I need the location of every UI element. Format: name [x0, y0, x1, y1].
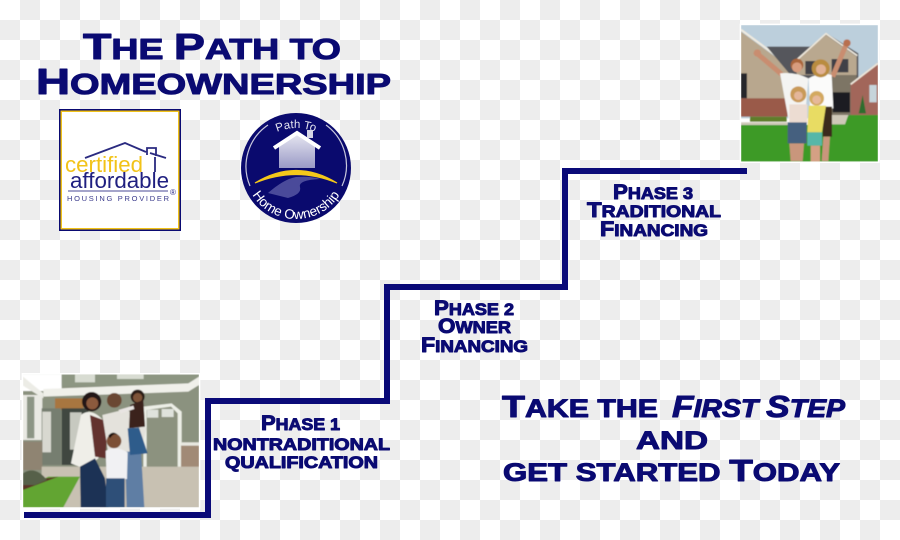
step label: phase 1	[213, 412, 390, 472]
title: H OMEOWNERSHIP	[36, 61, 391, 102]
photo: family of four in front of brick house	[740, 24, 880, 163]
title	[36, 26, 391, 102]
logo: path to home ownership badge: Home Ownership	[252, 190, 339, 219]
step label: phase 1: QUALIFICATION	[225, 453, 378, 472]
call to action: FIRST STEP	[672, 389, 845, 424]
step label: phase 3: PHASE 3	[613, 181, 693, 204]
logo: certified affordable housing provider: certified	[65, 152, 143, 177]
logo: certified affordable housing provider: affordable	[70, 168, 169, 193]
step label: phase 2	[421, 297, 528, 357]
step label: phase 3	[587, 181, 721, 241]
logo: certified affordable housing provider: HOUSING PROVIDER	[67, 194, 170, 203]
call to action: TAKE THE	[502, 389, 658, 424]
call to action: GET STARTED TODAY	[503, 453, 840, 488]
logo: certified affordable housing provider: ®	[170, 188, 176, 197]
logo: path to home ownership badge: Path To	[275, 120, 316, 132]
step label: phase 1: NONTRADITIONAL	[213, 435, 390, 454]
step label: phase 2: PHASE 2	[434, 297, 514, 320]
call to action: AND	[636, 427, 708, 455]
step label: phase 2: OWNER	[438, 315, 511, 338]
logo: path to home ownership badge	[241, 113, 351, 223]
title: THE PATH TO	[83, 26, 341, 67]
photo: family of four in front of grey house	[22, 373, 200, 509]
call to action	[502, 389, 845, 488]
step label: phase 2: FINANCING	[421, 334, 528, 357]
step label: phase 3: FINANCING	[600, 218, 708, 241]
step label: phase 3: TRADITIONAL	[587, 199, 721, 222]
step label: phase 1: PHASE 1	[261, 412, 340, 435]
logo: certified affordable housing provider	[59, 109, 181, 231]
staircase path	[24, 171, 747, 515]
